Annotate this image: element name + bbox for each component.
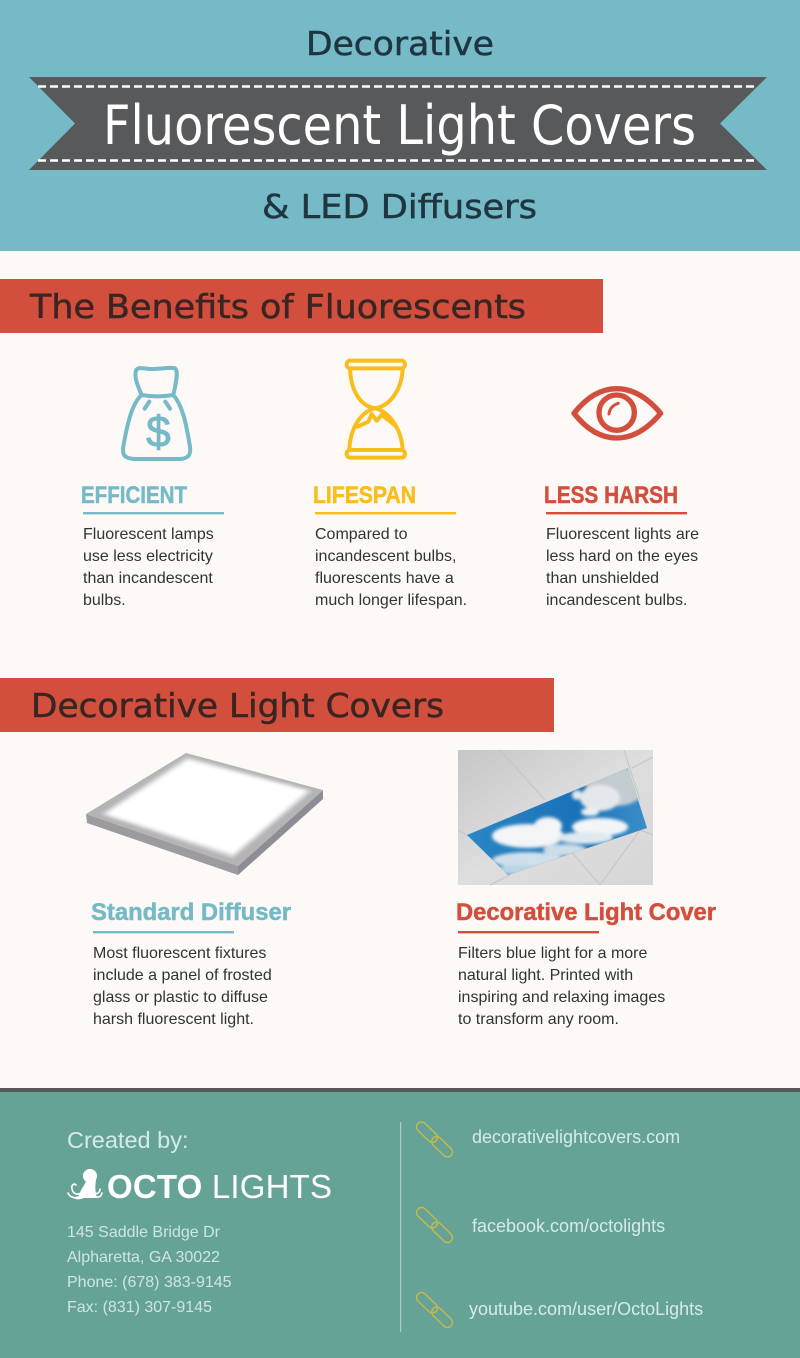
card: decorative light cover: to transform any room. [458, 1011, 619, 1028]
card: decorative light cover: inspiring and relaxing images [458, 989, 665, 1006]
image: decorative sky light cover on ceiling [458, 750, 653, 885]
section banner: Decorative Light Covers [0, 678, 554, 732]
benefit: lifespan: LIFESPAN [313, 482, 416, 509]
address: 145 Saddle Bridge Dr [67, 1224, 221, 1241]
icon: money bag: $ [146, 408, 171, 457]
icon: octopus logo [68, 1169, 102, 1198]
benefit: less harsh: LESS HARSH [544, 482, 678, 509]
benefit: efficient: than incandescent [83, 570, 213, 587]
icon: eye [574, 389, 661, 438]
icon: link 2 [414, 1205, 455, 1245]
link 2 text: facebook.com/octolights [472, 1216, 665, 1236]
lower clouds [492, 852, 564, 868]
address: Alpharetta, GA 30022 [67, 1249, 220, 1266]
address [67, 1224, 232, 1316]
section banner: Decorative Light Covers: Decorative Light Covers [31, 686, 444, 725]
footer panel [0, 1088, 800, 1358]
card: standard diffuser [91, 899, 291, 1028]
benefit: less harsh: incandescent bulbs. [546, 592, 687, 609]
main title: Fluorescent Light Covers [103, 94, 696, 157]
address: Phone: (678) 383-9145 [67, 1274, 232, 1291]
heading: Decorative: Decorative [306, 24, 494, 63]
logo wordmark: OCTO LIGHTS [107, 1168, 332, 1205]
link 1 text: decorativelightcovers.com [472, 1127, 680, 1147]
ribbon banner [29, 77, 767, 170]
icon: link 1 [414, 1120, 455, 1159]
benefit: efficient: bulbs. [83, 592, 126, 609]
icon: hourglass [347, 361, 405, 458]
centre clouds [492, 824, 564, 848]
section banner: The Benefits of Fluorescents: The Benefits of Fluorescents [29, 287, 526, 326]
icon: money bag [123, 368, 190, 459]
benefit: efficient: EFFICIENT [81, 482, 187, 509]
card: decorative light cover [456, 899, 716, 1028]
benefit: less harsh: less hard on the eyes [546, 548, 698, 565]
card: decorative light cover: natural light. Printed with [458, 967, 633, 984]
icon: link 3 [414, 1290, 455, 1330]
card: standard diffuser: glass or plastic to diffuse [93, 989, 268, 1006]
card: standard diffuser: Most fluorescent fixtures [93, 945, 266, 962]
benefit: less harsh: than unshielded [546, 570, 659, 587]
heading: & LED Diffusers: & LED Diffusers [262, 187, 537, 226]
card: standard diffuser: Standard Diffuser [91, 899, 291, 926]
upper right cloud [586, 766, 646, 806]
benefit: efficient: use less electricity [83, 548, 213, 565]
benefit: efficient [81, 482, 224, 609]
section banner: The Benefits of Fluorescents [0, 279, 603, 333]
header panel [0, 0, 800, 251]
card: standard diffuser: include a panel of frosted [93, 967, 272, 984]
link 3 text: youtube.com/user/OctoLights [469, 1299, 703, 1319]
card: decorative light cover: Filters blue light for a more [458, 945, 648, 962]
benefit: lifespan [313, 482, 467, 609]
address: Fax: (831) 307-9145 [67, 1299, 212, 1316]
benefit: less harsh [544, 482, 699, 609]
benefit: lifespan: much longer lifespan. [315, 592, 467, 609]
card: decorative light cover: Decorative Light Cover [456, 899, 716, 926]
benefit: less harsh: Fluorescent lights are [546, 526, 699, 543]
created by: Created by: [67, 1127, 188, 1153]
benefit: efficient: Fluorescent lamps [83, 526, 214, 543]
benefit: lifespan: Compared to [315, 526, 408, 543]
image: standard diffuser panel [86, 753, 323, 875]
benefit: lifespan: fluorescents have a [315, 570, 454, 587]
card: standard diffuser: harsh fluorescent light. [93, 1011, 254, 1028]
benefit: lifespan: incandescent bulbs, [315, 548, 456, 565]
